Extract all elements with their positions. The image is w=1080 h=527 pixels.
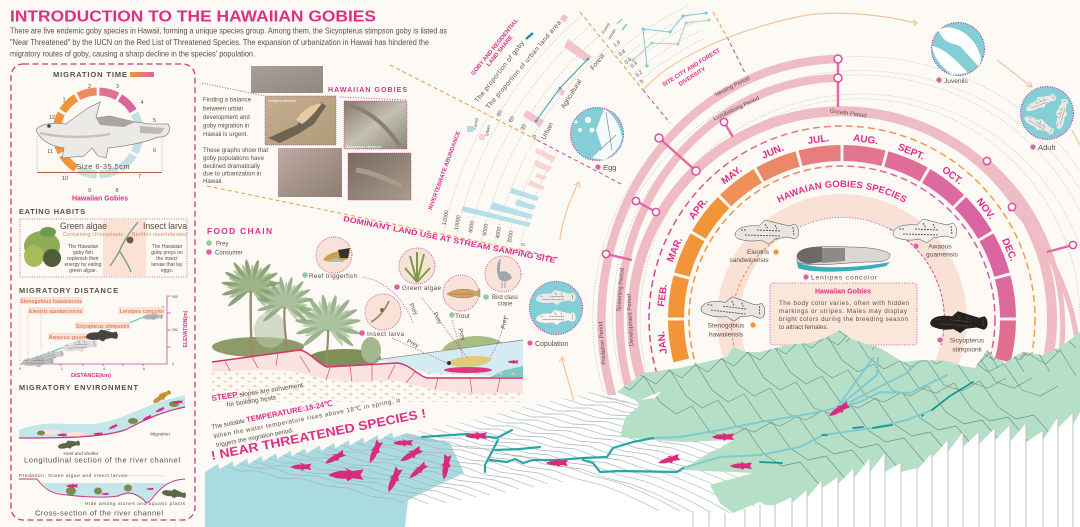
period labels: Development Period [627,294,635,346]
dashed ring: inner [689,166,995,472]
panel: eating habits: The Hawaiian [68,244,99,250]
terrain: sea [205,432,464,527]
dotted ring: species [732,217,944,360]
dotted rings [593,57,1080,400]
photo: goby 1 [251,66,323,93]
text: steep slopes: STEEP slopes are convenient [211,380,304,403]
size measure [37,136,162,172]
species: Eleotris sandwicensis: Eleotris [747,249,770,256]
label: Hawaiian gobies photos: HAWAIIAN GOBIES [328,87,407,94]
text: suitable temperature: When the water temperature rises above 18℃ in spring, it [213,397,401,440]
icon: green algae [24,227,61,267]
chart: invertebrate abundance: 2000 [507,230,515,243]
chart: invertebrate abundance: 4000 [495,226,503,239]
period labels: Growth Period [829,108,867,120]
chart: site city and forest diversity: 0.8 [618,49,627,58]
chart: migratory distance: 2 [61,367,63,371]
terrain: white sliver [640,391,662,400]
icon: adult [1020,86,1074,140]
diagram: longitudinal river section: Longitudinal section of the river channel [24,456,180,464]
photo: Sicyopterus: Sicyopterus stimpsoni [346,145,381,149]
chart: migratory distance: DISTANCE(km) [71,373,111,379]
month labels [656,133,1018,355]
chart: migratory distance: Stenogobius hawaiiensis [20,299,82,305]
photo: Sicyopterus [344,101,407,149]
species: Sicyopterus stimpsonii: stimpsonii [952,346,982,354]
icon: bird class crane [485,256,521,292]
icon: insect larva [365,294,401,330]
diagram: river cross section: Cross-section of the river channel [35,508,163,518]
month numbers: 10 [62,176,68,182]
callout: Hawaiian Gobies: The body color varies, often with hidden [779,300,910,307]
chart: migratory distance: Sicyopterus stimpsonii [76,324,129,330]
callout: Hawaiian Gobies: bright colors during the breeding season [779,316,909,323]
heading: migratory distance: MIGRATORY DISTANCE [19,286,118,295]
month numbers: 2 [88,84,91,90]
icon: insect larva [110,222,138,272]
terrain: green ridges [624,330,1076,484]
food chain arrows: Prey [456,328,466,341]
month labels: JUL. [807,133,830,147]
month numbers: 4 [140,100,144,106]
text: finding a balance: Hawaii is urgent. [203,131,248,138]
chart: site city and forest diversity: 0.4 [630,61,639,70]
chart: migratory distance: ELEVATION(m) [183,310,189,347]
fish: migrating gobies [291,400,851,494]
month labels: FEB. [656,283,670,307]
icon: green algae [399,248,435,284]
chart: migratory distance: 500 [172,295,178,299]
month labels: OCT. [939,165,964,187]
heading: migratory environment: MIGRATORY ENVIRONMENT [19,383,138,392]
chart: goby and residential land share: LAND SHARE [486,35,515,68]
species: Sicyopterus stimpsonii: Sicyopterus [950,338,985,344]
panel: eating habits: energy by eating [65,262,102,268]
chart: invertebrate abundance: 6000 [482,223,490,236]
terrain: white base [405,385,1080,527]
chart: migratory distance: 0 [19,367,21,371]
label: insect larva: Insect larva [367,331,404,338]
panel: food chain [206,226,523,402]
food chain arrows [362,277,509,363]
chart: migratory distance: 4 [103,367,105,371]
species: Awaous guamensis: Awaous [928,244,952,250]
period labels: Nesting Period [714,76,751,98]
text: suitable temperature [211,386,403,449]
panel: eating habits: The Hawaiian [152,244,183,250]
icon: goby fish illustration [36,102,170,158]
panel: eating habits: eggs. [161,268,173,274]
label: adult: Adult [1038,143,1056,152]
icon: juveniles [932,22,984,76]
dashed connector lines [207,12,745,258]
label: bird class crane [483,294,518,308]
terrain: green uplands [617,330,1080,515]
panel: eating habits: larvae that lay [151,262,183,268]
panel: eating habits: Insect larva [143,221,187,231]
panel: left overview [11,64,195,520]
label: trout: Trout [455,313,470,320]
chart: site city and forest diversity: Forest [600,21,611,35]
label: green algae: Green algae [402,285,441,292]
text: population decline: declined dramatically [203,163,261,170]
chart: migratory distance: Lentipes concolor [120,309,164,315]
photo: Lentipes concolor [265,96,336,145]
month numbers: 7 [138,174,141,180]
species: Eleotris sandwicensis: sandwicensis [729,257,769,264]
chart: site city and forest diversity: 1.0 [613,40,622,49]
chart: migratory distance: 0 [172,362,174,366]
species: Eleotris sandwicensis [729,220,799,264]
food chain arrows: Prey [406,339,419,349]
species: Stenogobius hawaiiensis: hawaiiensis [709,332,744,338]
icon: copulation [530,282,582,334]
dashed ring: outer [649,126,1035,512]
text: steep slopes: for building nests [226,394,277,409]
month labels: MAR. [665,236,685,264]
diagram: longitudinal river section [19,388,185,464]
text: finding a balance: goby migration in [203,122,249,130]
intro paragraph [10,26,447,58]
photo: goby 3 [278,148,342,197]
text: finding a balance: Finding a balance [203,96,252,104]
panel: eating habits: goby fish [73,250,93,256]
month labels: JAN. [656,330,670,355]
terrain: column teeth [760,412,1080,527]
text: population decline: due to urbanization in [203,170,261,178]
heading: eating habits: EATING HABITS [19,207,85,216]
ring: life-period bands [601,59,1077,408]
chart: site city and forest diversity: SITE CITY AND FOREST [662,48,722,88]
intro paragraph: "Near Threatened" by the IUCN on the Red List of Threatened Species. The expansion of urbanization in Hawaii has hindered the [10,38,429,47]
label: adult [1030,143,1056,152]
period labels: Predation Period [598,321,608,365]
heading: migration time: MIGRATION TIME [53,70,127,79]
chart: goby and residential land share: Forest [589,52,606,72]
label: bird class crane: crane [497,302,513,308]
text: suitable temperature: The suitable TEMPERATURE:18-24℃ [211,399,334,431]
species: Awaous guamensis: guamensis [926,252,959,258]
label: egg [595,163,617,172]
heading: food chain: FOOD CHAIN [207,226,272,236]
panel: eating habits: Green algae [60,221,107,231]
chart: invertebrate abundance [428,113,557,250]
text: finding a balance: between urban [203,106,243,112]
panel: eating habits: green algae. [69,268,97,274]
intro paragraph: migratory routes of goby, causing a sharp decline in the species' population. [10,50,255,58]
panel: eating habits [20,219,187,277]
heading: dominant land use: DOMINANT LAND USE AT STREAM SAMPING SITE [343,214,556,265]
chart: invertebrate abundance: Urban [484,124,491,137]
heading: species arc: HAWAIAN GOBIES SPECIES [776,180,906,203]
text: population decline: goby populations have [203,155,265,162]
terrain: column lines [693,413,1073,527]
chart: invertebrate abundance: 0 [521,243,527,247]
chart: migratory distance: Awaous guamensis [49,335,102,341]
terrain: contour lines [224,392,756,513]
food chain arrows: Prey [407,303,418,316]
panel: eating habits: the insect [156,256,178,262]
diagram: river cross section [19,473,187,518]
callout: Hawaiian Gobies: Hawaiian Gobies [815,288,871,296]
chart: site city and forest diversity: Urban [607,27,617,40]
month numbers [47,84,156,194]
text: population decline [203,147,268,185]
ring: months [676,153,1008,485]
legend: prey and consumer: Consumer [215,250,243,256]
month labels: AUG. [852,133,879,147]
photo: goby 4 [348,153,411,200]
species: Awaous guamensis [893,219,959,258]
month numbers: 5 [153,118,156,124]
chart: goby and residential land share: Agricultural [560,78,584,110]
panel: eating habits: goby preys on [151,250,183,256]
chart: site city and forest diversity: 0.6 [624,57,633,66]
month labels: JUN. [760,143,786,162]
photo: Lentipes concolor: Lentipes concolor [268,99,297,103]
icon: egg [570,108,624,160]
food chain arrows: Prey [501,316,509,329]
chart: goby and residential land share: The proportion of urban land area [485,19,563,111]
callout: Hawaiian Gobies: markings or stripes. Males may display [779,308,908,315]
period labels: Spawning Period [616,268,626,312]
chart: migratory distance [19,295,189,379]
month numbers: 6 [153,148,156,154]
period labels [598,76,867,365]
callout: Hawaiian Gobies [770,283,917,345]
species: Lentipes concolor: Lentipes concolor [811,274,878,282]
text: suitable temperature: triggers the migration period. [216,427,294,449]
chart: migratory distance: 6 [143,367,145,371]
chart: site city and forest diversity [600,5,722,88]
chart: site city and forest diversity: 0 [639,79,645,85]
diagram: river cross section: Hide among stones and aquatic plants [85,501,186,507]
chart: goby and residential land share: 90 [496,110,504,118]
chart: migratory distance: 250 [172,328,178,332]
month numbers: 3 [116,84,119,90]
heading: near threatened: ! NEAR THREATENED SPECIES ! [210,406,427,463]
chart: invertebrate abundance: Forest [472,117,479,130]
scene: palms [212,259,381,368]
scene: rock band [212,350,523,402]
month numbers: 12 [49,115,55,121]
month labels: SEPT. [896,142,926,163]
panel: Hawaiian gobies photos [202,66,411,200]
chart: invertebrate abundance: INVERTEBRATE ABUNDANCE [428,130,462,211]
chart: goby and residential land share: 30 [520,124,528,132]
text: finding a balance: development and [203,114,250,121]
panel: eating habits: Benthic invertebrates [132,232,187,238]
species: Sicyopterus stimpsonii [930,310,988,354]
chart: site city and forest diversity: DIVERSITY [678,66,707,88]
chart: goby and residential land share: GOBY AND RESIDENTIAL [470,17,520,77]
label: reef triggerfish: Reef triggerfish [309,273,357,280]
chart: goby and residential land share: 60 [508,116,516,124]
label: egg: Egg [603,163,617,172]
month numbers: 8 [115,188,119,194]
chart: invertebrate abundance: 12000 [442,210,450,226]
month labels: APR. [687,196,711,222]
species: Stenogobius hawaiiensis: Stenogobius [708,322,745,330]
chart: goby and residential land share: Urban [540,121,555,141]
text: finding a balance [203,96,252,138]
label: bird class crane: Bird class [492,295,518,301]
label: juveniles: Juvenils [944,78,969,85]
icon: reef triggerfish [316,237,352,273]
text: population decline: Hawaii. [203,178,223,185]
chart: goby and residential land share: The proportion of goby [474,39,526,104]
rivers [422,358,973,472]
chart: goby and residential land share: 0 [532,134,538,139]
diagram: river cross section: Predation: Green algae and insect larvae [19,473,127,479]
panel: eating habits: replenish their [67,256,99,262]
species: Stenogobius hawaiiensis [700,294,766,338]
month numbers: 11 [47,149,53,155]
month numbers: 9 [88,188,91,194]
month labels: MAY. [720,164,745,187]
chart: invertebrate abundance: 10000 [454,215,462,231]
wash ring [728,206,956,432]
legend bar: migration time [130,72,154,77]
chart: migration time ring [56,92,140,174]
chart: site city and forest diversity: 0.2 [635,70,644,79]
title: INTRODUCTION TO THE HAWAIIAN GOBIES [10,8,376,26]
label: Hawaiian Gobies: Hawaiian Gobies [72,196,128,202]
diagram: longitudinal river section: Migration [150,432,170,438]
intro paragraph: There are five endemic goby species in Hawaii, forming a unique species group. Among them, the Sicyopterus stimpson goby is listed as [10,26,447,36]
text: steep slopes [211,380,305,411]
month labels: NOV. [974,196,997,222]
chart: goby and residential land share [470,14,609,141]
chart: migratory distance: Eleotris sandwicensis [29,309,82,315]
label: copulation: Copulation [535,341,569,348]
chart: invertebrate abundance: 8000 [468,220,476,233]
arrows: life cycle [560,13,1080,402]
callout: Hawaiian Gobies: to attract females. [779,324,828,331]
diagram: longitudinal river section: Host and shelter [64,451,99,457]
label: juveniles [936,77,969,85]
text: population decline: These graphs show that [203,147,268,154]
period labels: Luzubationg Period [713,96,760,122]
food chain arrows: Prey [431,312,442,325]
species: Lentipes concolor [797,247,890,282]
legend: prey and consumer [206,240,243,256]
size measure: Size 6-35.5cm [76,162,130,171]
icon: trout [443,275,480,311]
month labels: DEC. [999,237,1018,263]
panel: eating habits: Containing chloroplasts [63,232,123,238]
legend: prey and consumer: Prey [216,242,228,248]
fish: goby in water [444,356,518,373]
stems and knobs [602,55,1077,260]
scene: water [375,336,523,377]
month numbers: 1 [62,98,66,104]
label: trout [449,312,470,320]
